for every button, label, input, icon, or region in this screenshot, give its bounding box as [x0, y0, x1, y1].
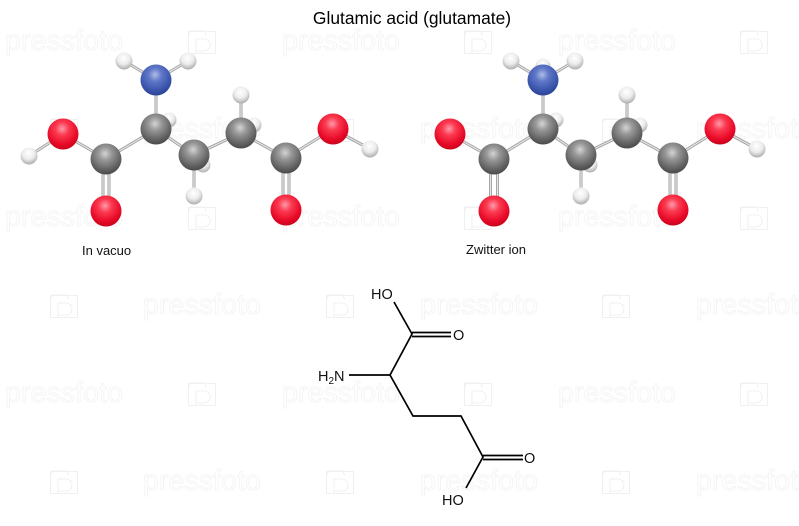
watermark pattern: pressfoto: [5, 377, 123, 409]
watermark pattern: pressfoto: [420, 289, 538, 321]
skeletal structural formula: N: [334, 369, 345, 385]
ball-and-stick model: in vacuo: [20, 52, 378, 226]
skeletal structural formula: [318, 287, 535, 509]
watermark pattern: pressfoto: [282, 201, 400, 233]
skeletal structural formula: O: [453, 328, 464, 344]
ball-and-stick model: zwitter ion: [434, 52, 766, 226]
skeletal structural formula: O: [524, 451, 535, 467]
title: Glutamic acid (glutamate): [313, 8, 511, 28]
watermark pattern: pressfoto: [143, 113, 261, 145]
watermark pattern: pressfoto: [282, 25, 400, 57]
skeletal structural formula: 2: [328, 376, 334, 387]
watermark pattern: pressfoto: [143, 465, 261, 497]
skeletal structural formula: H: [318, 369, 328, 385]
watermark pattern: pressfoto: [558, 377, 676, 409]
watermark pattern: pressfoto: [5, 201, 123, 233]
skeletal structural formula: HO: [371, 287, 393, 303]
watermark pattern: pressfoto: [5, 25, 123, 57]
label: in vacuo: In vacuo: [82, 243, 131, 258]
watermark pattern: pressfoto: [558, 201, 676, 233]
watermark pattern: pressfoto: [282, 377, 400, 409]
watermark pattern: pressfoto: [420, 113, 538, 145]
label: zwitter ion: Zwitter ion: [466, 242, 526, 257]
watermark pattern: pressfoto: [143, 289, 261, 321]
watermark pattern: pressfoto: [558, 25, 676, 57]
watermark pattern: pressfoto: [420, 465, 538, 497]
skeletal structural formula: HO: [442, 493, 464, 509]
